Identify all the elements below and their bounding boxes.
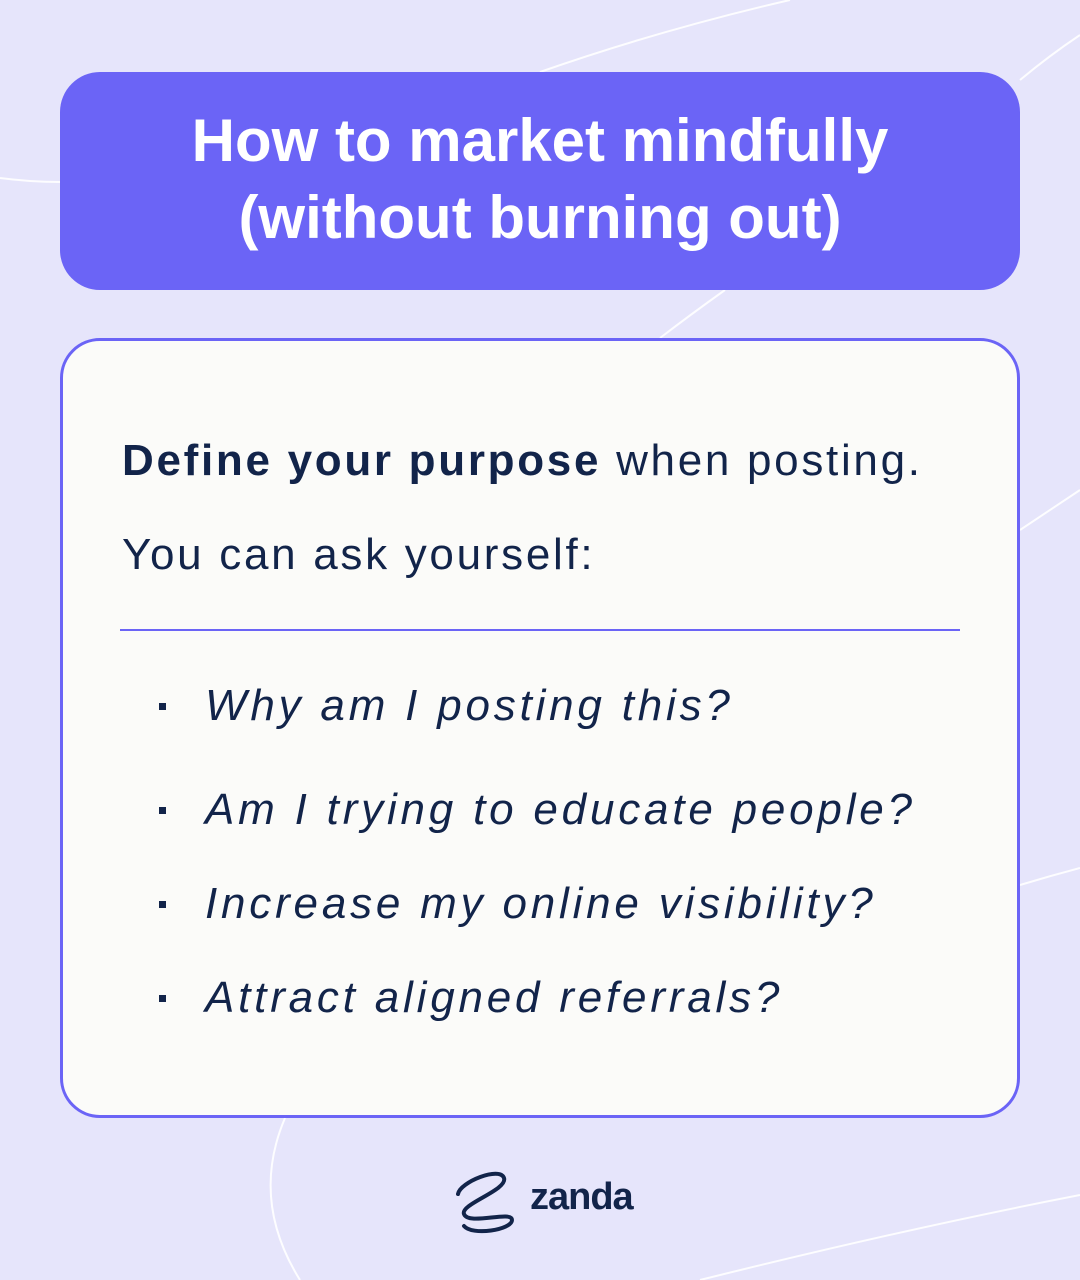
intro text: Define your purpose when posting.: [122, 436, 923, 485]
panel: content card: [60, 338, 1020, 1118]
bullet list: [159, 681, 916, 1022]
header banner: (without burning out): [238, 184, 842, 251]
prompt text: You can ask yourself:: [122, 530, 595, 579]
bullet list: Why am I posting this?: [205, 681, 734, 730]
icon: squiggle: [456, 1172, 514, 1234]
header banner: How to market mindfully: [192, 107, 888, 174]
bullet list: Am I trying to educate people?: [205, 785, 916, 834]
logo: zanda: zanda: [530, 1176, 633, 1218]
bullet list: Increase my online visibility?: [205, 879, 877, 928]
logo: zanda: [456, 1172, 634, 1234]
header banner: [60, 72, 1020, 290]
bullet list: Attract aligned referrals?: [205, 973, 783, 1022]
